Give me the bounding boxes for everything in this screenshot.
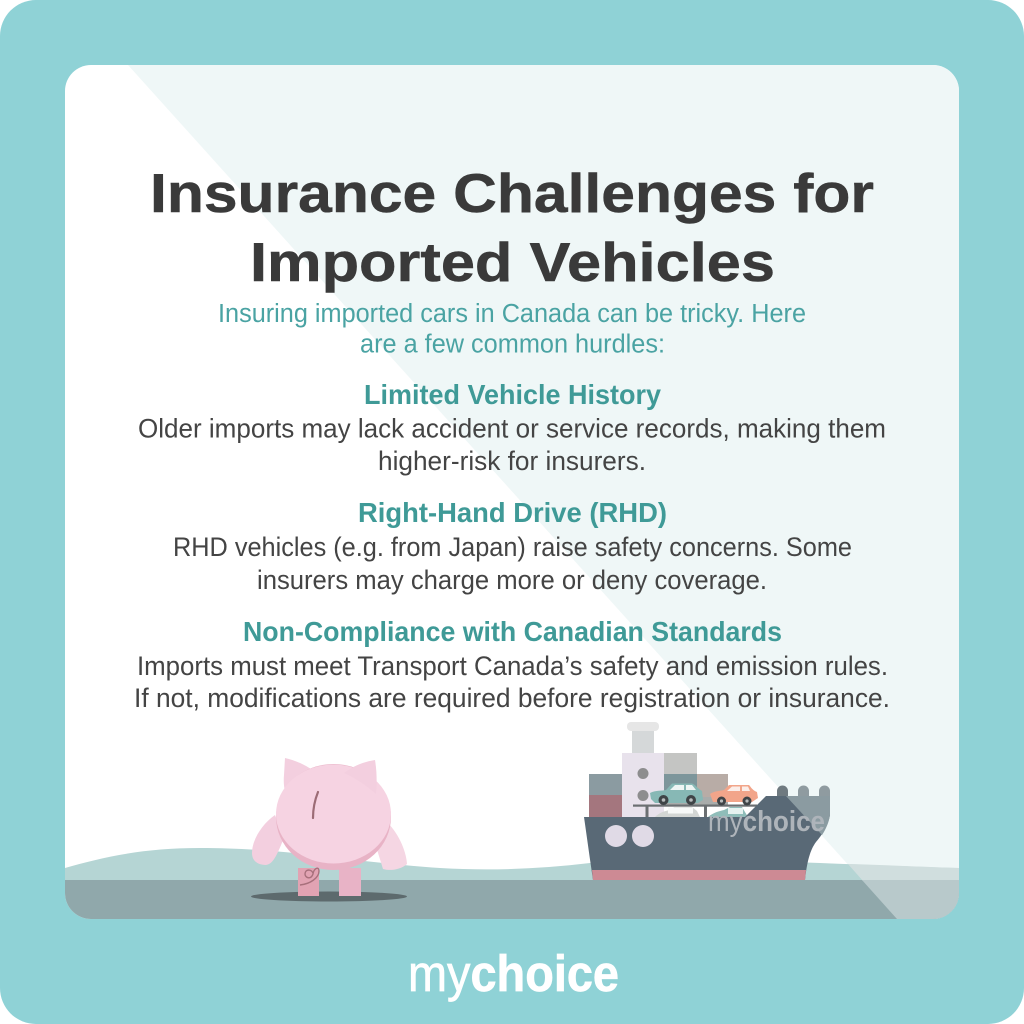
scenery: hills bbox=[65, 848, 959, 881]
section: non-compliance: Imports must meet Transport Canada’s safety and emission rules. bbox=[137, 651, 888, 681]
section: right-hand drive bbox=[173, 497, 852, 595]
ship hull bbox=[584, 796, 830, 880]
section: right-hand drive: Right-Hand Drive (RHD) bbox=[358, 497, 667, 528]
bow bollards bbox=[777, 786, 830, 796]
hull portholes bbox=[605, 825, 654, 847]
deck bbox=[633, 804, 757, 817]
section: limited vehicle history bbox=[138, 379, 886, 476]
section: limited vehicle history: higher-risk for insurers. bbox=[378, 446, 646, 476]
subtitle: Insuring imported cars in Canada can be tricky. Here bbox=[218, 300, 806, 328]
title bbox=[150, 162, 874, 293]
section: right-hand drive: RHD vehicles (e.g. from Japan) raise safety concerns. Some bbox=[173, 532, 852, 562]
teal car bbox=[650, 784, 703, 805]
section: right-hand drive: insurers may charge more or deny coverage. bbox=[257, 565, 767, 595]
title: Imported Vehicles bbox=[250, 231, 775, 293]
scenery: ground bbox=[65, 880, 959, 919]
section: non-compliance: Non-Compliance with Canadian Standards bbox=[243, 616, 782, 647]
section: non-compliance: If not, modifications are required before registration or insurance. bbox=[134, 683, 890, 713]
footer logo: mychoice bbox=[408, 945, 619, 1002]
ship watermark logo: mychoice bbox=[708, 806, 825, 838]
salmon car bbox=[710, 785, 758, 806]
title: Insurance Challenges for bbox=[150, 162, 874, 224]
section: limited vehicle history: Limited Vehicle History bbox=[364, 379, 662, 410]
illustration: piggy bank from behind bbox=[251, 758, 407, 902]
bridge tower bbox=[622, 753, 664, 817]
hull waterline stripe bbox=[592, 870, 806, 880]
diagonal overlay on lower scenery bbox=[848, 864, 959, 919]
illustration: cargo ship with cars bbox=[584, 722, 830, 880]
ship funnel bbox=[627, 722, 659, 753]
cargo containers bbox=[589, 753, 728, 817]
subtitle: are a few common hurdles: bbox=[360, 330, 665, 358]
diagonal light overlay on bow bbox=[786, 796, 830, 835]
section: non-compliance bbox=[134, 616, 890, 713]
subtitle bbox=[218, 300, 806, 358]
panel: white content card bbox=[65, 65, 959, 919]
section: limited vehicle history: Older imports may lack accident or service records, making them bbox=[138, 414, 886, 444]
lower deck cars bbox=[655, 807, 748, 817]
